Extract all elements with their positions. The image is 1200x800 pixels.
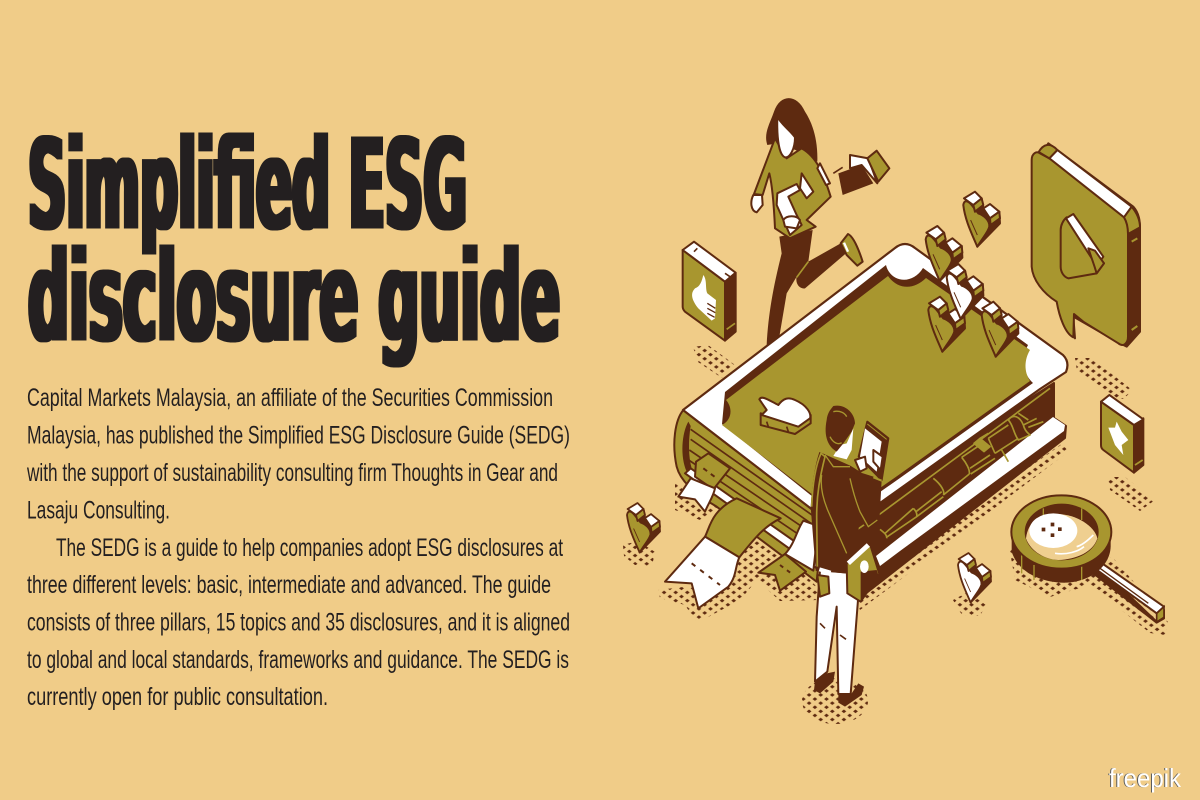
tablet	[859, 422, 888, 480]
speech bubble	[1032, 143, 1140, 347]
heart 5	[982, 302, 1018, 357]
lens opening	[1025, 504, 1099, 560]
pocket	[817, 575, 829, 597]
body text: Lasaju Consulting.	[27, 496, 170, 524]
rim	[1011, 495, 1111, 569]
thumb up card	[683, 242, 736, 341]
body text	[26, 384, 570, 711]
jacket	[812, 453, 881, 573]
cursor hand	[759, 398, 811, 434]
body text: three different levels: basic, intermediate and advanced. The guide	[27, 571, 551, 599]
star card	[1101, 395, 1143, 473]
man with tablet	[812, 406, 888, 707]
ribbons	[665, 453, 818, 608]
book	[674, 244, 1067, 598]
hand	[751, 195, 763, 212]
body text: Capital Markets Malaysia, an affiliate of the Securities Commission	[27, 384, 553, 412]
magnifying glass	[1011, 495, 1164, 623]
hair	[826, 406, 855, 452]
heart 7	[958, 553, 991, 602]
lens	[1026, 514, 1097, 560]
heart 1	[963, 192, 1000, 247]
handle	[1093, 563, 1164, 623]
body text: Malaysia, has published the Simplified ESG Disclosure Guide (SEDG)	[27, 422, 570, 450]
rim depth	[1012, 530, 1111, 583]
heart 3	[928, 297, 965, 352]
body text: with the support of sustainability consulting firm Thoughts in Gear and	[26, 459, 558, 487]
legs	[815, 570, 858, 694]
heart 2	[926, 226, 962, 281]
shoes	[814, 672, 835, 693]
flying paper	[833, 151, 889, 195]
books	[777, 184, 802, 235]
hands	[855, 457, 867, 472]
small ribbon	[695, 453, 730, 489]
torso	[754, 138, 831, 238]
body text: currently open for public consultation.	[27, 683, 328, 711]
body text: to global and local standards, frameworks and guidance. The SEDG is	[27, 646, 569, 674]
freepik credit: freepik	[1109, 763, 1182, 793]
hair	[766, 98, 817, 162]
legs	[767, 230, 846, 345]
body text: The SEDG is a guide to help companies adopt ESG disclosures at	[56, 534, 563, 562]
neck and face	[833, 428, 853, 459]
book cover	[683, 244, 1067, 531]
title	[28, 113, 560, 370]
title: Simplified ESG	[28, 113, 467, 258]
face	[777, 117, 795, 157]
text: disclosure guide	[28, 225, 560, 370]
heart 6	[627, 503, 660, 552]
big ribbon	[705, 498, 781, 557]
book spine	[838, 383, 1066, 598]
book page block	[674, 410, 823, 582]
woman running	[751, 98, 863, 345]
body text: consists of three pillars, 15 topics and 35 disclosures, and it is aligned	[27, 608, 570, 636]
third ribbon	[785, 521, 818, 571]
spine ornament	[857, 388, 1050, 538]
hearts	[627, 192, 1018, 602]
halftone shadows	[623, 345, 1168, 724]
messenger bag	[847, 544, 879, 602]
shoe	[841, 234, 863, 266]
heart 4	[947, 264, 983, 319]
